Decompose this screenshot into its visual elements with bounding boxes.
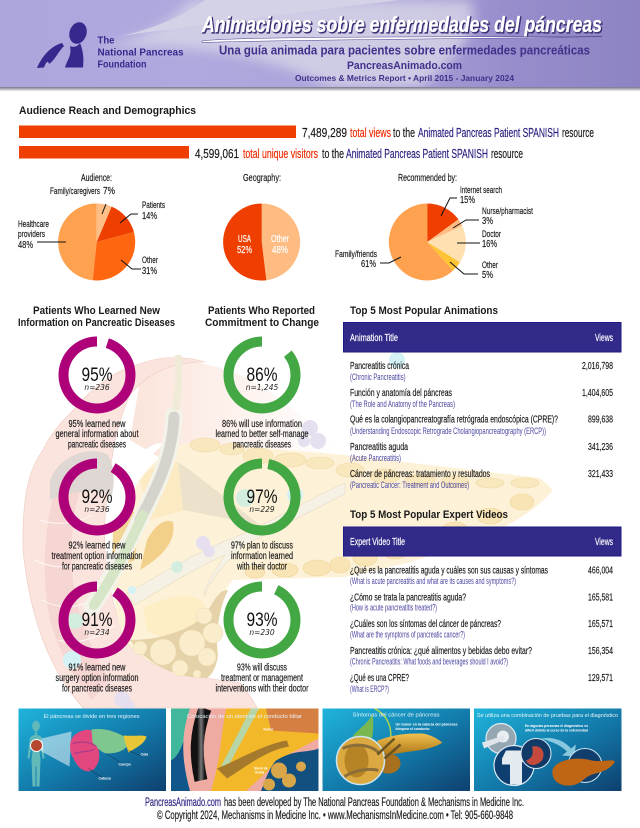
caption: 92%: treatment option information bbox=[52, 551, 142, 562]
pie chart: recommended by: Other bbox=[482, 260, 498, 271]
caption: 95% bbox=[56, 419, 139, 450]
caption: 92%: for pancreatic diseases bbox=[62, 562, 132, 572]
caption: 97%: with their doctor bbox=[236, 562, 287, 572]
table: top animations: 341,236 bbox=[588, 442, 613, 453]
yellow upper lobe bbox=[140, 462, 185, 520]
donut: 92%: 92% bbox=[82, 487, 113, 508]
donut: 92% bbox=[64, 464, 130, 530]
pie chart: geography bbox=[223, 173, 300, 280]
panel: pancreas regions thumbnail bbox=[18, 708, 166, 791]
table: top expert videos: ¿Qué es una CPRE? bbox=[350, 673, 409, 684]
heading: learned new information: Information on Pancreatic Diseases bbox=[18, 317, 175, 329]
bar: unique visitors: Animated Pancreas Patient SPANISH bbox=[346, 147, 488, 161]
caption: 93%: 93% will discuss bbox=[237, 662, 287, 674]
caption: 91%: for pancreatic diseases bbox=[62, 684, 132, 694]
header banner bbox=[0, 0, 640, 92]
heading: learned new information bbox=[18, 305, 175, 329]
panel: cancer symptoms thumbnail: Un tumor en la cabeza del páncreas bbox=[396, 722, 458, 726]
table: top expert videos: (How is acute pancreatitis treated?) bbox=[350, 602, 437, 612]
caption: 97%: information learned bbox=[231, 551, 293, 562]
pie chart: audience: Patients bbox=[142, 200, 165, 211]
panel: pancreas regions thumbnail: El páncreas se divide en tres regiones bbox=[44, 714, 140, 720]
bar: total views bbox=[19, 126, 594, 140]
caption: 93% bbox=[216, 662, 309, 694]
donut: 97%: 97% bbox=[246, 487, 278, 508]
donut: 93%: n=230 bbox=[249, 628, 275, 637]
table: top expert videos: 165,581 bbox=[588, 592, 613, 604]
pie chart: geography: Other bbox=[271, 234, 289, 245]
footer: developer credit bbox=[145, 797, 524, 809]
donut: 91%: n=234 bbox=[84, 628, 110, 637]
pie chart: audience: 48% bbox=[18, 240, 33, 251]
caption: 93%: interventions with their doctor bbox=[216, 684, 309, 694]
table: top animations: Animation Title bbox=[350, 333, 398, 344]
panel: cancer symptoms thumbnail: bloquea el conducto bbox=[396, 727, 430, 731]
table: top expert videos: (What is acute pancreatitis and what are its causes and symptoms?) bbox=[350, 576, 516, 586]
pie chart: audience: 31% bbox=[142, 266, 157, 277]
table: top animations: (The Role and Anatomy of the Pancreas) bbox=[350, 399, 455, 409]
pie chart: geography: USA bbox=[238, 234, 251, 245]
caption: 86%: pancreatic diseases bbox=[233, 440, 291, 450]
pie chart: audience: Family/caregivers bbox=[50, 186, 100, 197]
donut: 92%: n=236 bbox=[84, 505, 110, 514]
caption: 95%: general information about bbox=[56, 429, 139, 440]
panel: biliary stent thumbnail bbox=[171, 708, 318, 791]
panel: diagnostic tests thumbnail: En algunas personas el diagnóstico es bbox=[525, 724, 588, 728]
subtitle: Una guía animada para pacientes sobre enfermedades pancreáticas bbox=[219, 44, 590, 58]
pie chart: audience: Audience: bbox=[81, 173, 112, 184]
table: top animations: Pancreatitis crónica bbox=[350, 361, 409, 372]
caption: 91% bbox=[56, 662, 138, 694]
donut: 97%: n=229 bbox=[249, 505, 275, 514]
bar: total views: total views bbox=[350, 126, 391, 140]
caption: 86% bbox=[216, 419, 309, 450]
table: top expert videos: Views bbox=[595, 537, 613, 548]
pancreas body pale yellow bbox=[113, 442, 553, 678]
panel: biliary stent thumbnail: Colocación de un stent en el conducto biliar bbox=[187, 714, 302, 720]
pie chart: recommended by: 3% bbox=[482, 216, 493, 227]
table: top expert videos: 165,571 bbox=[588, 619, 613, 630]
panel: biliary stent thumbnail: metal bbox=[255, 770, 264, 774]
panel: diagnostic tests thumbnail: difícil debido al curso de la enfermedad bbox=[525, 728, 588, 732]
table: top animations: 899,638 bbox=[588, 414, 613, 426]
table: top animations: Función y anatomía del páncreas bbox=[350, 388, 452, 399]
pie chart: audience: Other bbox=[142, 255, 158, 266]
panel: biliary stent thumbnail: Tumor bbox=[263, 728, 274, 732]
table: top animations: 1,404,605 bbox=[582, 388, 613, 399]
pie chart: recommended by: Doctor bbox=[482, 229, 501, 240]
lower nodules bbox=[130, 590, 228, 678]
heading: top expert videos: Top 5 Most Popular Expert Videos bbox=[350, 509, 508, 521]
bar: unique visitors: total unique visitors bbox=[243, 147, 318, 161]
donut: 91%: 91% bbox=[82, 610, 113, 631]
pie chart: audience: 7% bbox=[103, 186, 115, 197]
bar: total views: resource bbox=[562, 126, 594, 140]
table: top expert videos: 156,354 bbox=[588, 646, 613, 657]
pie chart: audience: Healthcare bbox=[18, 219, 49, 230]
pie chart: audience: providers bbox=[18, 229, 45, 240]
background illustration: pale pancreas anatomy bbox=[23, 352, 553, 712]
floating cells bbox=[114, 420, 326, 712]
heading: audience reach: Audience Reach and Demographics bbox=[19, 105, 196, 117]
donut: 95%: 95% bbox=[82, 365, 113, 386]
donut: 95% bbox=[64, 342, 130, 408]
heading: top animations: Top 5 Most Popular Animations bbox=[350, 305, 498, 317]
caption: 91%: 91% learned new bbox=[68, 662, 126, 674]
panel: pancreas regions thumbnail: Cola bbox=[140, 752, 148, 756]
caption: 92% bbox=[52, 540, 142, 572]
bar: total views: to the bbox=[393, 126, 415, 140]
caption: 93%: treatment or management bbox=[221, 673, 303, 684]
heading: commitment to change bbox=[205, 305, 319, 329]
pie chart: recommended by: 5% bbox=[482, 270, 493, 281]
pie chart: recommended by: Internet search bbox=[460, 185, 502, 196]
caption: 92%: 92% learned new bbox=[68, 540, 126, 552]
heading: commitment to change: Patients Who Reported bbox=[208, 305, 315, 317]
panel: biliary stent thumbnail: Stent de bbox=[254, 766, 268, 770]
pie chart: recommended by bbox=[335, 173, 533, 281]
pie chart: recommended by: Nurse/pharmacist bbox=[482, 206, 533, 217]
table: top animations: Pancreatitis aguda bbox=[350, 442, 408, 453]
bar: unique visitors: 4,599,061 bbox=[195, 147, 239, 161]
table: top expert videos: ¿Cuáles son los síntomas del cáncer de páncreas? bbox=[350, 619, 501, 630]
table: top expert videos: 129,571 bbox=[588, 673, 613, 684]
bar: unique visitors: resource bbox=[491, 147, 523, 161]
interior pale wash bbox=[130, 360, 335, 470]
pie chart: geography: Geography: bbox=[243, 173, 281, 184]
title swoosh bbox=[202, 36, 602, 42]
table: top expert videos: 466,004 bbox=[588, 566, 613, 576]
donut: 93% bbox=[228, 586, 296, 654]
caption: 97%: 97% plan to discuss bbox=[231, 540, 293, 552]
table: top animations bbox=[344, 322, 621, 490]
panel: diagnostic tests thumbnail bbox=[474, 708, 622, 791]
table: top expert videos: Expert Video Title bbox=[350, 537, 405, 548]
lower yellow lobe bbox=[143, 595, 206, 638]
logo: National Pancreas Foundation: Foundation bbox=[98, 60, 146, 70]
outer duodenum wall bbox=[23, 358, 257, 708]
pie chart: audience: 14% bbox=[142, 211, 157, 222]
heading: commitment to change: Commitment to Change bbox=[205, 317, 319, 329]
pie chart: recommended by: 16% bbox=[482, 239, 497, 250]
report period: Outcomes & Metrics Report • April 2015 - January 2024 bbox=[295, 73, 514, 83]
logo: National Pancreas Foundation: The bbox=[98, 36, 115, 46]
pancreatic duct bbox=[127, 483, 345, 605]
bar: unique visitors bbox=[19, 146, 523, 161]
table: top animations: Views bbox=[595, 333, 613, 344]
table: top animations: 321,433 bbox=[588, 469, 613, 480]
gold lobes bbox=[112, 512, 140, 570]
caption: 91%: surgery option information bbox=[56, 673, 138, 684]
white crescent bbox=[123, 443, 165, 485]
table: top expert videos: Pancreatitis crónica: ¿qué alimentos y bebidas debo evitar? bbox=[350, 646, 532, 657]
table: top animations: (Chronic Pancreatitis) bbox=[350, 372, 406, 382]
upper nodules bbox=[190, 438, 539, 488]
table: top animations: (Pancreatic Cancer: Treatment and Outcomes) bbox=[350, 480, 469, 490]
table: top expert videos: ¿Cómo se trata la pancreatitis aguda? bbox=[350, 592, 466, 604]
table: top expert videos: ¿Qué es la pancreatitis aguda y cuáles son sus causas y síntomas bbox=[350, 566, 548, 576]
donut: 97% bbox=[228, 464, 296, 530]
pie chart: recommended by: Recommended by: bbox=[398, 173, 457, 184]
pie chart: recommended by: Family/friends bbox=[335, 249, 377, 260]
donut: 95%: n=236 bbox=[84, 383, 110, 392]
pie chart: recommended by: 15% bbox=[460, 195, 475, 206]
pie chart: geography: 48% bbox=[272, 245, 288, 256]
table: top expert videos: (What is ERCP?) bbox=[350, 684, 389, 694]
pie chart: geography: 52% bbox=[237, 245, 252, 256]
pie chart: audience bbox=[18, 173, 165, 281]
panel: cancer symptoms thumbnail bbox=[322, 708, 470, 791]
caption: 97% bbox=[231, 540, 293, 572]
pie chart: recommended by: 61% bbox=[361, 259, 376, 270]
footer: developer credit: PancreasAnimado.com bbox=[145, 797, 221, 809]
panel: diagnostic tests thumbnail: Se utiliza una combinación de pruebas para el diagnóstico bbox=[477, 713, 618, 719]
table: top animations: 2,016,798 bbox=[582, 361, 613, 372]
caption: 95%: 95% learned new bbox=[68, 419, 126, 430]
bar: unique visitors: to the bbox=[322, 147, 344, 161]
caption: 95%: pancreatic diseases bbox=[68, 440, 126, 450]
panel: cancer symptoms thumbnail: Síntomas del cáncer de páncreas bbox=[352, 712, 440, 718]
panel: pancreas regions thumbnail: Cabeza bbox=[98, 776, 111, 780]
green tube bbox=[92, 415, 174, 607]
donut: 86%: 86% bbox=[246, 365, 278, 386]
table: top animations: (Acute Pancreatitis) bbox=[350, 453, 401, 463]
bar: total views: 7,489,289 bbox=[302, 126, 347, 140]
caption: 86%: learned to better self-manage bbox=[216, 429, 309, 440]
donut: 91% bbox=[64, 586, 130, 654]
donut: 86%: n=1,245 bbox=[246, 383, 278, 392]
logo: National Pancreas Foundation: National Pancreas bbox=[98, 48, 184, 58]
donut: 86% bbox=[228, 342, 296, 408]
table: top animations: Cáncer de páncreas: tratamiento y resultados bbox=[350, 469, 490, 480]
panel: pancreas regions thumbnail: Cuerpo bbox=[118, 762, 131, 766]
table: top expert videos bbox=[344, 527, 621, 694]
table: top expert videos: (Chronic Pancreatitis: What foods and beverages should I avoid?) bbox=[350, 656, 508, 666]
table: top expert videos: (What are the symptoms of pancreatic cancer?) bbox=[350, 630, 465, 640]
heading: learned new information: Patients Who Learned New bbox=[33, 305, 160, 317]
donut: 93%: 93% bbox=[246, 610, 278, 631]
lower tail nodules bbox=[245, 494, 534, 578]
logo: National Pancreas Foundation bbox=[37, 20, 184, 70]
caption: 86%: 86% will use information bbox=[222, 419, 302, 430]
bar: total views: Animated Pancreas Patient SPANISH bbox=[418, 126, 559, 140]
website: PancreasAnimado.com bbox=[347, 60, 462, 72]
